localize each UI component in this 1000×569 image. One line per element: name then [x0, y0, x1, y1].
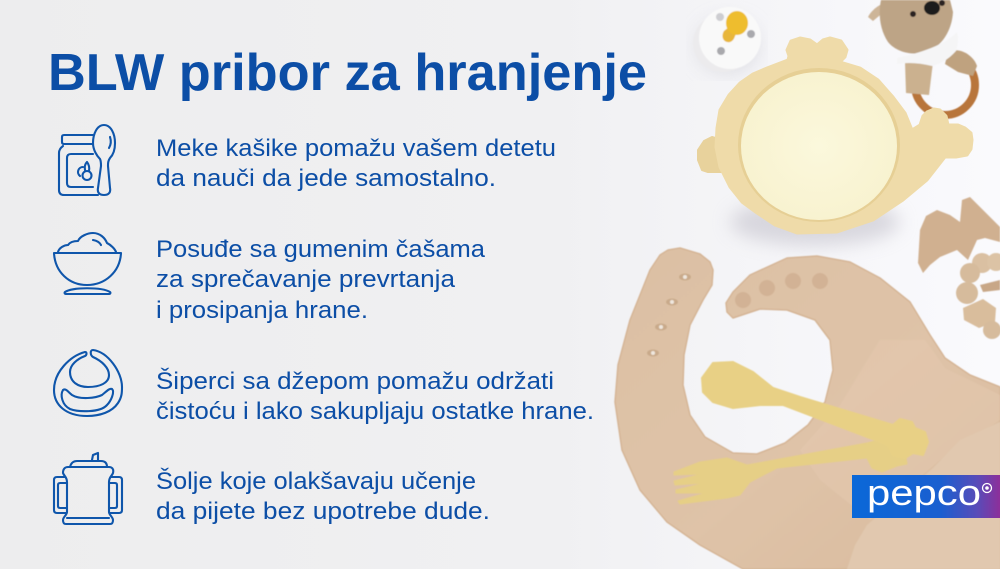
photo: bib — [615, 248, 1000, 569]
text: bibs with pocket: Šiperci sa džepom pomažu održati — [156, 367, 554, 395]
logo: pepco: pepco — [867, 472, 981, 513]
text: suction dishes: i prosipanja hrane. — [156, 297, 368, 324]
photo: yellow spoon — [702, 362, 928, 458]
bib strap holes — [647, 274, 691, 356]
title: BLW pribor za hranjenje — [48, 44, 647, 102]
icon: jar and spoon — [59, 125, 115, 195]
bib snap buttons — [735, 273, 828, 308]
text: training cups: da pijete bez upotrebe dude. — [156, 498, 490, 525]
text: soft spoons — [156, 135, 556, 192]
bowl handle — [698, 137, 722, 172]
icon: bib — [54, 350, 122, 416]
text: suction dishes — [156, 236, 485, 324]
text: soft spoons: da nauči da jede samostalno. — [156, 165, 496, 192]
bib pocket fold — [847, 422, 1000, 569]
text: suction dishes: za sprečavanje prevrtanja — [156, 266, 455, 293]
photo: wooden toy and beads — [918, 197, 1000, 339]
text: bibs with pocket — [156, 367, 594, 425]
porridge — [741, 72, 897, 220]
bib shading — [800, 340, 1000, 520]
photo: yellow fork — [674, 441, 907, 504]
logo: pepco — [852, 472, 1000, 518]
text: bibs with pocket: čistoću i lako sakupljaju ostatke hrane. — [156, 398, 594, 425]
bowl shadow — [730, 198, 900, 246]
text: suction dishes: Posuđe sa gumenim čašama — [156, 236, 485, 263]
text: training cups: Šolje koje olakšavaju učenje — [156, 467, 476, 495]
bowl body with ears and tail — [716, 38, 972, 233]
photo: bowl with porridge — [698, 38, 972, 246]
photo: crochet bear teether — [868, 0, 977, 115]
icon: bowl — [54, 233, 121, 294]
text: soft spoons: Meke kašike pomažu vašem detetu — [156, 135, 556, 162]
photo: pacifier — [693, 7, 761, 74]
text: training cups — [156, 467, 490, 525]
icon: sippy cup — [54, 453, 122, 524]
bowl inner rim — [738, 68, 900, 222]
